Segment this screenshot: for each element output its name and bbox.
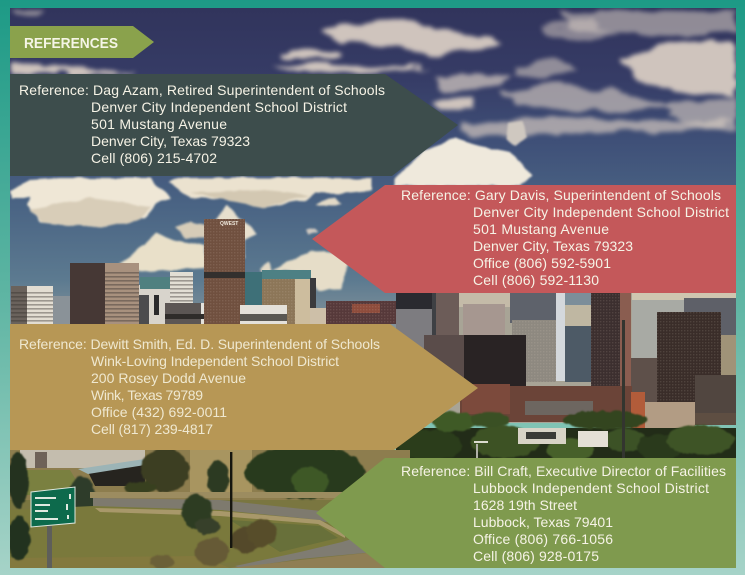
text: Bill Craft contact: Lubbock Independent School District xyxy=(473,480,709,496)
text: Bill Craft contact: Cell (806) 928-0175 xyxy=(473,548,599,564)
text: Dag Azam contact: Cell (806) 215-4702 xyxy=(91,150,217,166)
text: Gary Davis contact xyxy=(401,187,729,288)
qwest sign on tower: QWEST xyxy=(220,221,238,227)
icon: highway sign xyxy=(31,487,75,568)
right skyline backdrop xyxy=(430,293,632,423)
text: Dewitt Smith contact: Cell (817) 239-4817 xyxy=(91,421,213,437)
panel: Dewitt Smith reference xyxy=(10,324,478,450)
left skyline buildings xyxy=(11,219,396,324)
text: Bill Craft contact xyxy=(401,463,726,564)
panel: Dag Azam reference xyxy=(10,74,458,176)
white cumulus clouds xyxy=(10,120,532,290)
text: Gary Davis contact: Cell (806) 592-1130 xyxy=(473,272,599,288)
text: Bill Craft contact: Reference: Bill Craft, Executive Director of Facilities xyxy=(401,463,726,479)
panel: Bill Craft reference xyxy=(316,458,736,568)
text: Bill Craft contact: 1628 19th Street xyxy=(473,497,577,513)
sky xyxy=(10,8,736,328)
text: Gary Davis contact: 501 Mustang Avenue xyxy=(473,221,609,237)
foreground: park with road xyxy=(8,445,410,570)
text: Bill Craft contact: Office (806) 766-1056 xyxy=(473,531,613,547)
text: Gary Davis contact: Office (806) 592-5901 xyxy=(473,255,611,271)
text: Bill Craft contact: Lubbock, Texas 79401 xyxy=(473,514,613,530)
text: Gary Davis contact: Reference: Gary Davis, Superintendent of Schools xyxy=(401,187,721,203)
text: Dewitt Smith contact: Wink, Texas 79789 xyxy=(91,387,203,403)
panel: Gary Davis reference xyxy=(312,185,736,293)
right skyline buildings xyxy=(396,293,736,432)
text: Dag Azam contact xyxy=(19,82,385,166)
heading text: REFERENCES xyxy=(24,35,118,52)
banner: references heading xyxy=(10,26,154,58)
tree line xyxy=(396,320,736,462)
text: Dewitt Smith contact: 200 Rosey Dodd Avenue xyxy=(91,370,246,386)
text: Dewitt Smith contact: Wink-Loving Independent School District xyxy=(91,353,339,369)
text: Dag Azam contact: Denver City Independent School District xyxy=(91,99,347,115)
text: Dewitt Smith contact xyxy=(19,336,380,437)
text: Dag Azam contact: 501 Mustang Avenue xyxy=(91,116,227,132)
text: Dag Azam contact: Reference: Dag Azam, Retired Superintendent of Schools xyxy=(19,82,385,98)
text: Dewitt Smith contact: Reference: Dewitt Smith, Ed. D. Superintendent of Schools xyxy=(19,336,380,352)
high wispy clouds xyxy=(10,10,736,136)
text: Dag Azam contact: Denver City, Texas 79323 xyxy=(91,133,250,149)
text: Gary Davis contact: Denver City, Texas 79323 xyxy=(473,238,633,254)
text: Dewitt Smith contact: Office (432) 692-0011 xyxy=(91,404,227,420)
text: Gary Davis contact: Denver City Independent School District xyxy=(473,204,729,220)
